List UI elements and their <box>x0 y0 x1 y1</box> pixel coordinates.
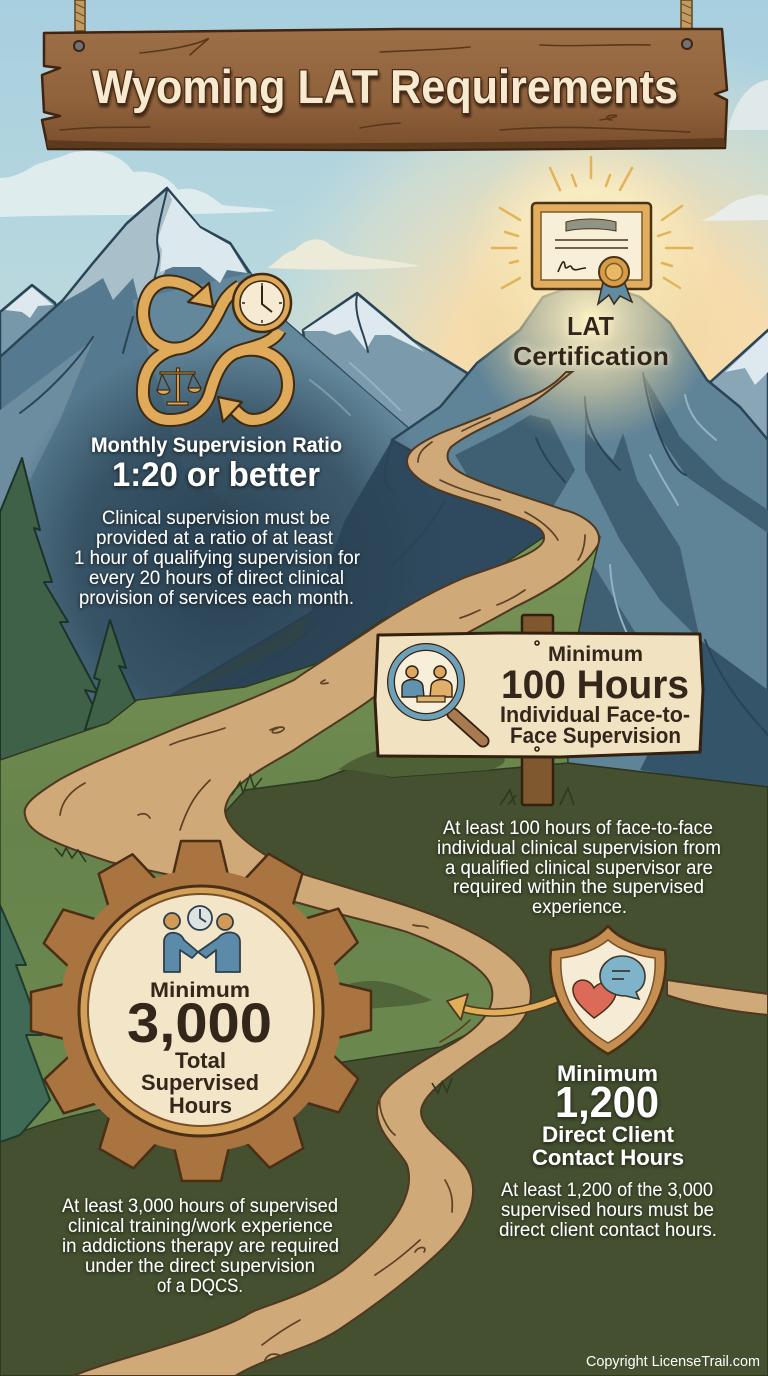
100 hours description <box>437 818 721 918</box>
darker hill patch <box>338 743 505 777</box>
signpost: 100 hours: 100 Hours <box>501 663 689 707</box>
dark mountain area behind ratio text <box>0 340 460 760</box>
mountain ridge lines <box>20 190 768 735</box>
loop outline <box>143 281 288 420</box>
wood grain <box>60 39 690 132</box>
100 hours description: experience. <box>532 897 627 918</box>
LAT certification label: Certification <box>513 341 669 371</box>
gear teeth <box>31 841 371 1181</box>
clock <box>233 274 291 332</box>
arrow from shield to gear <box>447 994 556 1020</box>
certificate lines <box>555 240 628 248</box>
middle back peak <box>303 293 500 480</box>
sky background <box>0 0 768 480</box>
100 hours description: required within the supervised <box>453 877 704 898</box>
nails <box>74 41 84 51</box>
1,200 hours description: supervised hours must be <box>501 1200 714 1221</box>
3,000 hours description: of a DQCS. <box>157 1276 243 1297</box>
gear text: Minimum <box>150 979 250 1002</box>
100 hours description: At least 100 hours of face-to-face <box>443 818 713 839</box>
shield icon <box>550 926 666 1054</box>
ribbon seal <box>598 276 632 304</box>
clouds <box>0 80 768 270</box>
ropes <box>75 0 692 31</box>
title sign <box>42 0 727 150</box>
big left mountain <box>0 188 440 770</box>
signpost: 100 hours: Face Supervision <box>510 723 681 748</box>
title: Wyoming LAT Requirements <box>92 60 678 113</box>
gear badge: 3,000 hours: 3,000 <box>127 991 272 1054</box>
dark valley behind the trail <box>130 440 600 730</box>
wood board <box>42 29 727 150</box>
signature <box>558 262 586 272</box>
arrowheads <box>188 283 213 307</box>
100 hours description: a qualified clinical supervisor are <box>445 858 713 879</box>
3,000 hours description <box>62 1196 339 1297</box>
sunset glow behind certification <box>450 130 740 400</box>
monthly supervision ratio text: Clinical supervision must be <box>102 508 330 529</box>
certificate frame <box>532 203 651 289</box>
signpost: 100 hours: Individual Face-to- <box>500 702 690 727</box>
gear body <box>60 870 342 1152</box>
LAT certification label: LAT <box>567 311 614 341</box>
1,200 hours heading: Minimum <box>557 1061 658 1086</box>
scales <box>157 368 201 405</box>
far right peak <box>707 330 768 450</box>
gear badge: 3,000 hours <box>31 841 371 1181</box>
trees upper left <box>0 458 142 780</box>
monthly supervision ratio text: 1:20 or better <box>112 456 320 494</box>
1,200 hours description: At least 1,200 of the 3,000 <box>501 1180 713 1201</box>
1,200 hours heading: Contact Hours <box>532 1145 684 1170</box>
monthly supervision ratio text: Monthly Supervision Ratio <box>91 434 342 457</box>
3,000 hours description: At least 3,000 hours of supervised <box>62 1196 338 1217</box>
1,200 hours description <box>499 1180 717 1241</box>
gear badge: 3,000 hours: Total <box>175 1048 226 1073</box>
darker hill patch near gear <box>345 981 432 1012</box>
mountains background <box>0 188 768 770</box>
sign board <box>375 633 703 757</box>
tree lower left <box>0 905 50 1142</box>
sign text: Minimum <box>548 643 643 666</box>
gear badge: 3,000 hours: Supervised <box>141 1070 259 1095</box>
monthly supervision ratio text <box>74 434 361 609</box>
post <box>522 615 553 805</box>
left mountain left facet <box>0 340 93 540</box>
green hills <box>0 520 600 1140</box>
monthly supervision ratio text: provided at a ratio of at least <box>96 528 334 549</box>
LAT certification label <box>513 311 669 371</box>
warm sunset sky <box>200 20 768 480</box>
1,200 hours heading: 1,200 <box>555 1078 659 1127</box>
main right mountain <box>392 280 768 800</box>
foreground dark ground <box>0 763 768 1376</box>
3,000 hours description: under the direct supervision <box>85 1256 315 1277</box>
handshake icon <box>164 906 240 972</box>
speech bubble <box>600 956 645 999</box>
monthly supervision ratio text: 1 hour of qualifying supervision for <box>74 548 361 569</box>
1,200 hours heading <box>532 1061 684 1170</box>
monthly supervision ratio text: every 20 hours of direct clinical <box>89 568 344 589</box>
peak glow <box>460 195 720 445</box>
sign nails <box>535 641 539 751</box>
main mountain facets <box>455 373 768 790</box>
grass at post base <box>500 788 574 805</box>
magnifier icon <box>391 647 483 741</box>
certificate banner <box>566 219 616 231</box>
left mountain right face <box>132 273 420 560</box>
snow caps <box>5 190 768 385</box>
3,000 hours description: in addictions therapy are required <box>62 1236 339 1257</box>
left small peak <box>0 285 90 470</box>
gear badge: 3,000 hours: Hours <box>169 1093 232 1118</box>
gear rim <box>79 886 323 1136</box>
100 hours description: individual clinical supervision from <box>437 838 721 859</box>
pale streaks on main mountain <box>310 363 716 650</box>
certificate icon with rays <box>492 157 692 304</box>
trail path <box>25 372 768 1376</box>
1,200 hours description: direct client contact hours. <box>499 1220 717 1241</box>
copyright: Copyright LicenseTrail.com <box>586 1353 760 1370</box>
supervision loop icon <box>143 274 291 422</box>
1,200 hours heading: Direct Client <box>542 1122 675 1147</box>
heart <box>573 980 616 1018</box>
rays <box>492 157 692 288</box>
3,000 hours description: clinical training/work experience <box>68 1216 333 1237</box>
gear face <box>88 894 314 1126</box>
signpost: 100 hours <box>375 615 703 805</box>
loop fill <box>143 281 288 420</box>
monthly supervision ratio text: provision of services each month. <box>79 588 354 609</box>
